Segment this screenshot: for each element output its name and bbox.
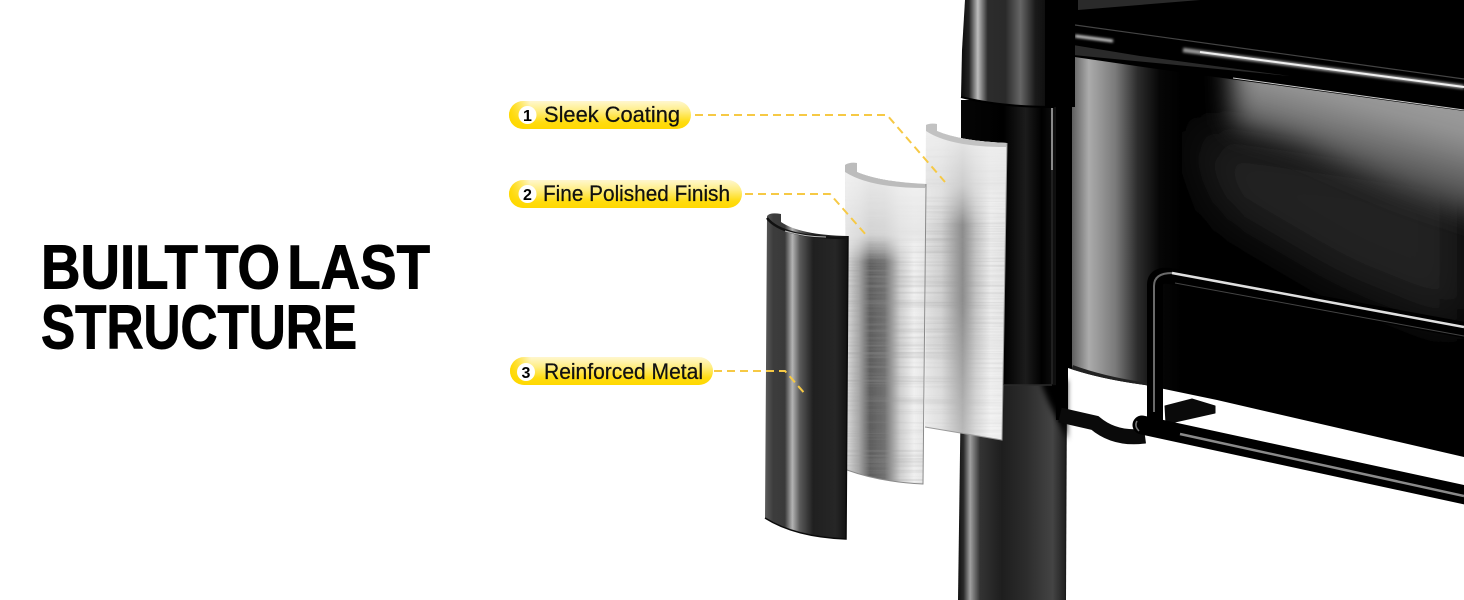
part: reinforced metal strip xyxy=(765,213,848,539)
product: cart tub with rim xyxy=(1068,0,1464,457)
callout line: reinforced metal xyxy=(714,371,806,395)
label 1: sleek coating xyxy=(509,101,691,129)
title: BUILT TO LAST xyxy=(41,234,430,302)
label 2: fine polished finish: Fine Polished Finish xyxy=(543,181,730,206)
part: sleek coating strip xyxy=(925,124,1007,440)
product: wire rack xyxy=(1060,273,1464,496)
part: fine polished finish strip xyxy=(845,163,926,484)
title xyxy=(41,234,430,362)
label 2: fine polished finish: 2 xyxy=(523,187,532,204)
callout line: fine polished finish xyxy=(745,194,867,236)
product: vertical pole xyxy=(958,0,1075,600)
callout line: sleek coating xyxy=(695,115,945,182)
label 1: sleek coating: Sleek Coating xyxy=(544,102,680,127)
label 3: reinforced metal: Reinforced Metal xyxy=(544,359,703,384)
label 3: reinforced metal: 3 xyxy=(522,365,531,382)
label 1: sleek coating: 1 xyxy=(523,108,532,125)
title: STRUCTURE xyxy=(41,294,357,362)
